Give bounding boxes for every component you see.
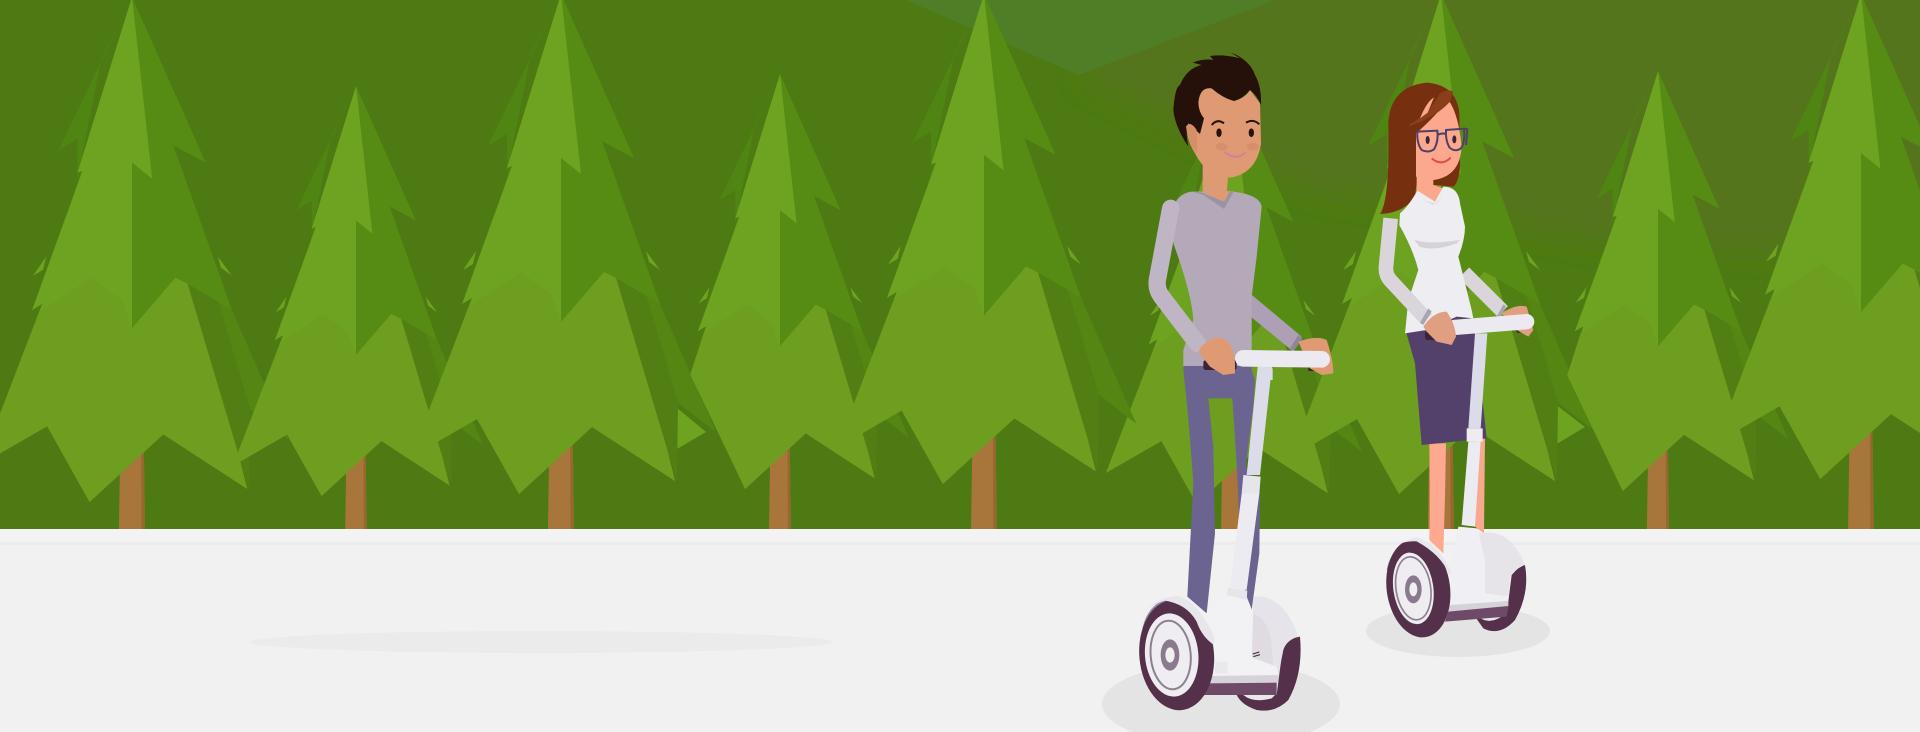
man shadow	[1102, 662, 1340, 732]
woman on scooter	[1380, 83, 1533, 642]
man on scooter	[1135, 52, 1333, 713]
woman shadow	[1366, 605, 1550, 657]
branch tips	[677, 404, 1585, 449]
back row trees	[1106, 0, 1596, 654]
background shadow area	[1079, 0, 1920, 250]
forest background	[0, 0, 1920, 532]
woman lower body and scooter	[1380, 308, 1526, 642]
woman upper body	[1380, 83, 1533, 345]
front row tree foliage	[0, 0, 1920, 502]
ground	[0, 529, 1920, 732]
man upper body	[1157, 52, 1333, 380]
empty ground shadow	[250, 631, 832, 653]
man lower body and scooter	[1135, 360, 1301, 713]
background light wedge	[906, 0, 1275, 75]
